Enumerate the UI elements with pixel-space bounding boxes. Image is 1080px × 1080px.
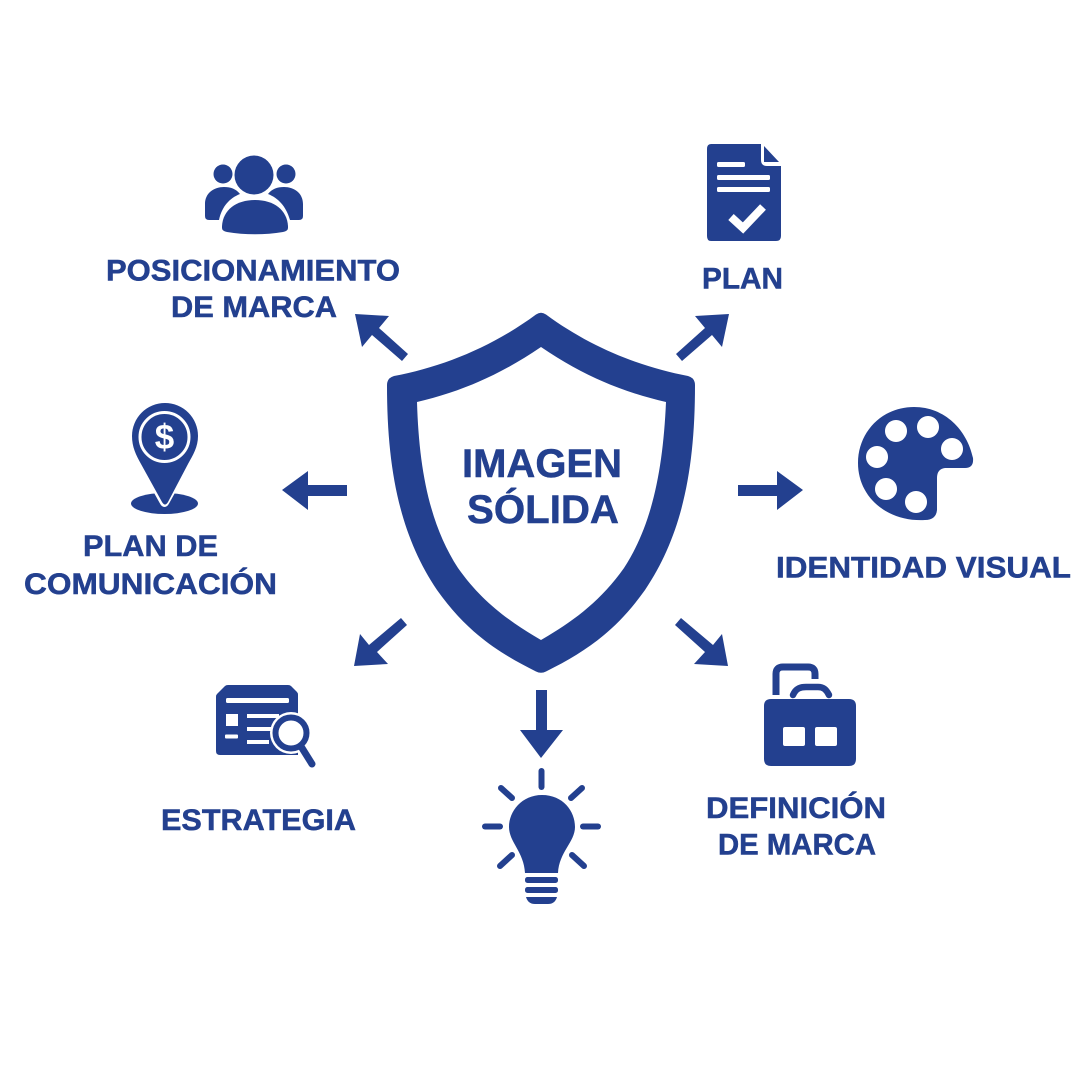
shield title: SÓLIDA [467, 486, 619, 532]
arrow: to posicionamiento de marca [355, 314, 408, 361]
item: posicionamiento de marca [106, 156, 400, 324]
item: identidad visual [776, 407, 1071, 584]
icon: card with magnifier [216, 685, 312, 764]
label: DE MARCA [718, 828, 876, 862]
arrow: to definición de marca [675, 618, 728, 666]
label: POSICIONAMIENTO [106, 254, 400, 288]
label: IDENTIDAD VISUAL [776, 552, 1071, 584]
label [106, 254, 400, 324]
icon: briefcase [764, 667, 856, 766]
label [706, 791, 886, 862]
label [24, 530, 277, 601]
icon: palette [858, 407, 973, 520]
icon: document with check [707, 144, 781, 241]
label: COMUNICACIÓN [24, 567, 277, 601]
icon: location pin with dollar [131, 403, 198, 514]
arrow: to identidad visual [738, 471, 803, 510]
label: DEFINICIÓN [706, 791, 886, 825]
icon: people [205, 156, 303, 234]
item: plan de comunicación [24, 403, 277, 601]
label: DE MARCA [171, 291, 337, 324]
shield title [462, 442, 622, 532]
item: plan [702, 144, 783, 296]
item: idea [485, 771, 598, 904]
shield title: IMAGEN [462, 442, 622, 486]
label: PLAN DE [83, 530, 218, 563]
arrow: to idea [520, 690, 563, 758]
arrow: to plan [676, 314, 729, 361]
icon: light bulb [485, 771, 598, 904]
label: ESTRATEGIA [161, 804, 356, 837]
central shield [387, 313, 695, 673]
label: PLAN [702, 262, 783, 296]
arrow: to estrategia [354, 618, 407, 666]
arrow: to plan de comunicación [282, 471, 347, 510]
item: estrategia [161, 685, 356, 837]
item: definición de marca [706, 667, 886, 862]
icon: location pin with dollar: $ [155, 418, 174, 457]
